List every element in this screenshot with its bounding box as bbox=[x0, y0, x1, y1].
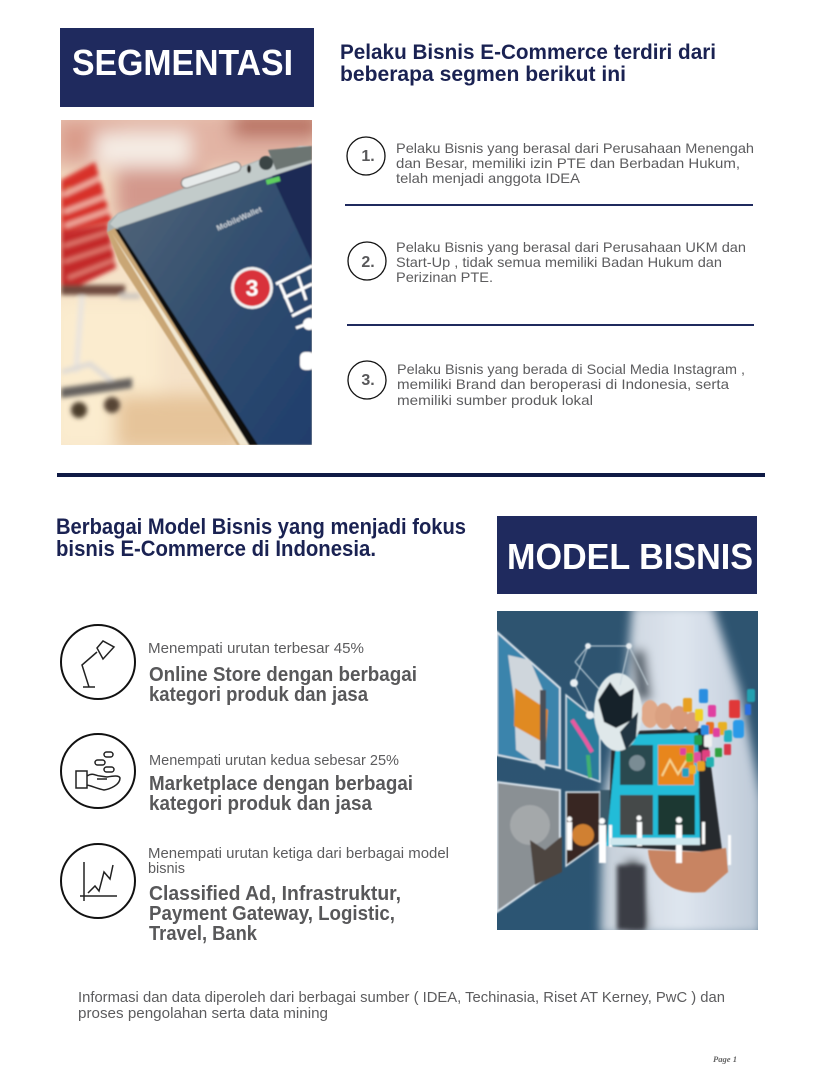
business model 3: other models bbox=[61, 844, 449, 945]
photo: smartphone with shopping cart: 3 bbox=[246, 275, 258, 301]
photo: smartphone with shopping cart: MobileWallet bbox=[215, 205, 264, 233]
number badge 3: 3. bbox=[361, 372, 375, 389]
icon: line chart bbox=[61, 844, 135, 918]
item 3 text: memiliki Brand dan beroperasi di Indonesia, serta bbox=[397, 376, 729, 392]
item 2 text: Start-Up , tidak semua memiliki Badan Hukum dan bbox=[396, 254, 722, 270]
item 1 text: Pelaku Bisnis yang berasal dari Perusahaan Menengah bbox=[396, 140, 754, 156]
model 3 name: Payment Gateway, Logistic, bbox=[149, 903, 395, 925]
heading: business model intro: bisnis E-Commerce di Indonesia. bbox=[56, 536, 376, 561]
title: Segmentasi: SEGMENTASI bbox=[72, 42, 293, 83]
model 3 name bbox=[149, 883, 401, 945]
model 3 name: Classified Ad, Infrastruktur, bbox=[149, 883, 401, 905]
item 1 text: telah menjadi anggota IDEA bbox=[396, 170, 581, 186]
item 2 text: Pelaku Bisnis yang berasal dari Perusahaan UKM dan bbox=[396, 239, 746, 255]
model 3 rank: bisnis bbox=[148, 860, 185, 877]
business model 1: online store bbox=[61, 625, 417, 706]
photo: businessman holding digital tablet bbox=[497, 605, 762, 935]
item 2 text bbox=[396, 239, 746, 285]
model 1 name: kategori produk dan jasa bbox=[149, 684, 369, 706]
model 2 name bbox=[149, 773, 413, 815]
icon: desk lamp bbox=[61, 625, 135, 699]
model 2 rank: Menempati urutan kedua sebesar 25% bbox=[149, 752, 399, 769]
number badge 1 bbox=[347, 137, 385, 175]
title: Segmentasi bbox=[60, 28, 314, 107]
number badge 2: 2. bbox=[361, 254, 375, 271]
model 2 name: kategori produk dan jasa bbox=[149, 793, 373, 815]
heading: segment intro bbox=[340, 41, 716, 86]
page number: Page 1 bbox=[713, 1055, 737, 1064]
item 3 bbox=[348, 361, 745, 408]
item 3 text: memiliki sumber produk lokal bbox=[397, 392, 593, 408]
source note: proses pengolahan serta data mining bbox=[78, 1006, 328, 1022]
model 3 rank: Menempati urutan ketiga dari berbagai model bbox=[148, 845, 449, 862]
heading: business model intro bbox=[56, 514, 466, 561]
item 1 bbox=[347, 137, 754, 186]
photo: smartphone with shopping cart bbox=[61, 120, 312, 445]
model 1 name: Online Store dengan berbagai bbox=[149, 664, 417, 686]
number badge 2 bbox=[348, 242, 386, 280]
heading: segment intro: Pelaku Bisnis E-Commerce terdiri dari bbox=[340, 41, 716, 64]
model 3 rank bbox=[148, 845, 449, 877]
title: Model Bisnis: MODEL BISNIS bbox=[507, 536, 753, 577]
model 1 rank: Menempati urutan terbesar 45% bbox=[148, 640, 364, 657]
title: Model Bisnis bbox=[497, 516, 757, 594]
number badge 1: 1. bbox=[361, 148, 375, 165]
heading: segment intro: beberapa segmen berikut ini bbox=[340, 63, 626, 86]
model 2 name: Marketplace dengan berbagai bbox=[149, 773, 413, 795]
item 1 text bbox=[396, 140, 754, 186]
icon: hand with coins bbox=[61, 734, 135, 808]
model 3 name: Travel, Bank bbox=[149, 923, 258, 945]
item 3 text bbox=[397, 361, 745, 408]
heading: business model intro: Berbagai Model Bisnis yang menjadi fokus bbox=[56, 514, 466, 539]
item 1 text: dan Besar, memiliki izin PTE dan Berbadan Hukum, bbox=[396, 155, 740, 171]
item 2 bbox=[348, 239, 746, 285]
number badge 3 bbox=[348, 361, 386, 399]
model 1 name bbox=[149, 664, 417, 706]
item 2 text: Perizinan PTE. bbox=[396, 269, 493, 285]
source note: Informasi dan data diperoleh dari berbagai sumber ( IDEA, Techinasia, Riset AT Kerney, PwC ) dan bbox=[78, 990, 725, 1006]
source note bbox=[78, 990, 725, 1022]
business model 2: marketplace bbox=[61, 734, 413, 815]
item 3 text: Pelaku Bisnis yang berada di Social Media Instagram , bbox=[397, 361, 745, 377]
